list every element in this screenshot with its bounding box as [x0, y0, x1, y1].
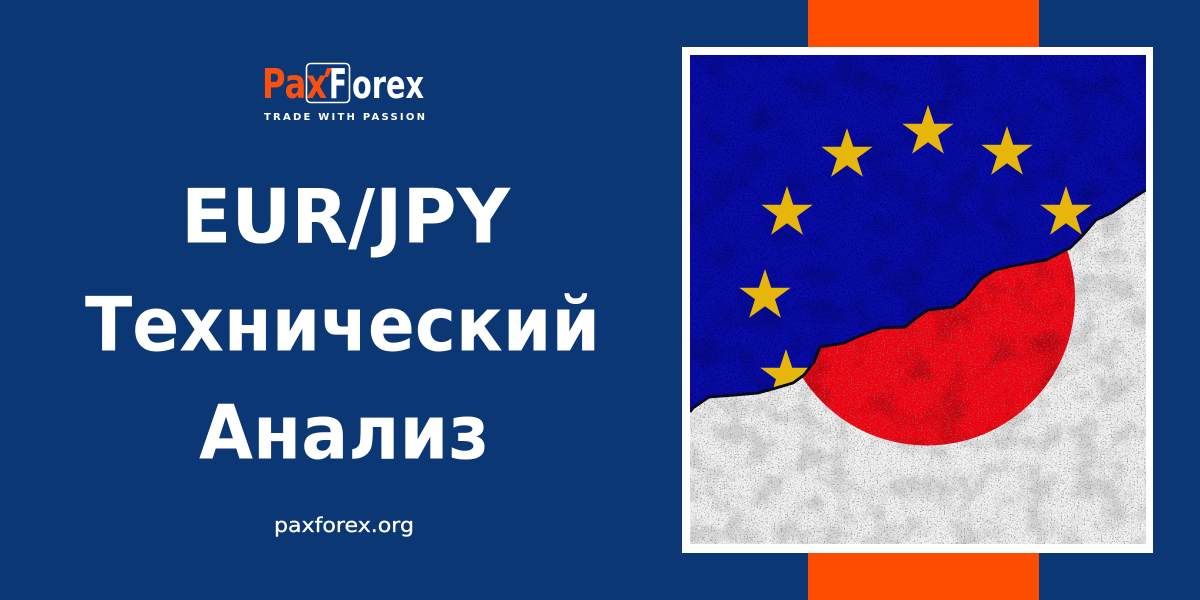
logo accent slash — [324, 68, 332, 77]
logo wordmark Pax: Pax — [262, 60, 327, 108]
photo: cracked wall with EU and Japan flags — [690, 55, 1146, 544]
title line: Анализ: Анализ — [199, 388, 489, 476]
eu stars — [739, 105, 1092, 398]
eu flag blue area — [690, 55, 1146, 410]
logo letter F: F — [329, 60, 347, 108]
photo frame — [682, 47, 1153, 553]
title line: EUR/JPY: EUR/JPY — [181, 172, 512, 260]
japan flag red disc — [802, 250, 1075, 446]
website url: paxforex.org — [274, 513, 414, 537]
orange vertical band — [808, 0, 1039, 600]
logo: PaxForex — [262, 60, 425, 123]
logo badge outline — [306, 64, 350, 102]
japan flag white concrete — [690, 192, 1146, 544]
title line: Технический: Технический — [85, 280, 600, 368]
logo wordmark orex: orex — [352, 63, 424, 107]
logo tagline: TRADE WITH PASSION — [264, 112, 425, 123]
crack line — [690, 190, 1146, 412]
